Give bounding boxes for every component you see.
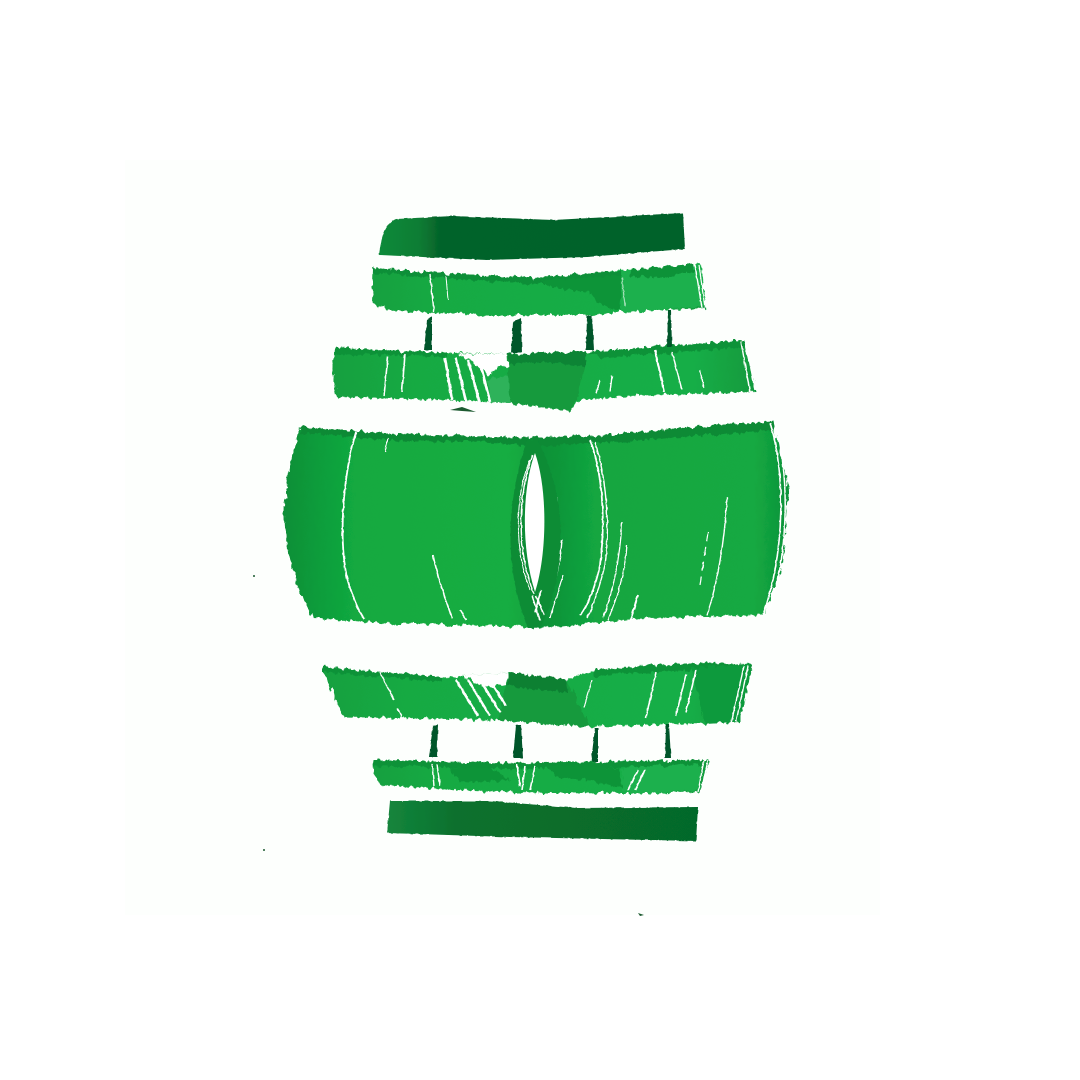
pegs: lower row (429, 724, 671, 762)
pegs: upper row (424, 310, 672, 353)
stroke: top dark bar (379, 213, 685, 260)
stroke: large central right lobe (527, 422, 788, 628)
stroke: lower thin band (374, 760, 710, 793)
stroke: second band (372, 264, 707, 315)
central white eye opening (510, 440, 561, 628)
ink specks (253, 407, 644, 916)
stroke: lower band (322, 663, 752, 727)
stroke: large central left lobe (285, 427, 533, 627)
stroke: bottom dark bar (387, 801, 698, 841)
stroke: third band (332, 340, 757, 411)
